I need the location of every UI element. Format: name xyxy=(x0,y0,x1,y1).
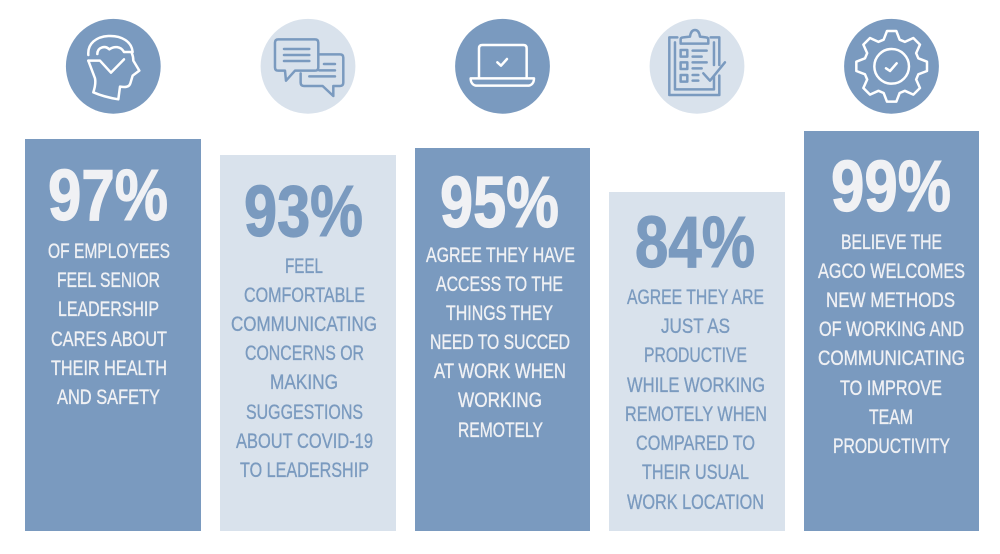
text: just as productive: WORK LOCATION xyxy=(627,491,764,514)
text: senior leadership: THEIR HEALTH xyxy=(51,357,167,380)
text: access to things: WORKING xyxy=(458,389,542,412)
text: senior leadership: CARES ABOUT xyxy=(51,328,167,351)
text: just as productive: THEIR USUAL xyxy=(642,461,749,484)
text: senior leadership: OF EMPLOYEES xyxy=(48,240,170,263)
text: just as productive: REMOTELY WHEN xyxy=(625,403,767,426)
text: just as productive: JUST AS xyxy=(661,315,730,338)
text: access to things: REMOTELY xyxy=(458,419,543,442)
text: communicating concerns: SUGGESTIONS xyxy=(246,401,363,424)
text: access to things: THINGS THEY xyxy=(446,302,553,325)
text: communicating concerns: ABOUT COVID-19 xyxy=(236,430,373,453)
stat: 84%: 84% xyxy=(635,203,755,283)
text: communicating concerns: FEEL xyxy=(285,255,323,278)
text: communicating concerns xyxy=(231,255,377,482)
text: communicating concerns: MAKING xyxy=(270,371,338,394)
text: communicating concerns: CONCERNS OR xyxy=(245,342,364,365)
text: communicating concerns: TO LEADERSHIP xyxy=(240,459,369,482)
text: communicating concerns: COMMUNICATING xyxy=(231,313,377,336)
text: access to things: ACCESS TO THE xyxy=(436,273,563,296)
text: new methods: TEAM xyxy=(869,406,913,429)
text: access to things: AT WORK WHEN xyxy=(434,360,566,383)
text: senior leadership: LEADERSHIP xyxy=(58,298,159,321)
icon: clipboard checklist xyxy=(650,19,744,114)
text: just as productive: WHILE WORKING xyxy=(627,374,765,397)
text: new methods: PRODUCTIVITY xyxy=(833,435,950,458)
text: access to things: AGREE THEY HAVE xyxy=(426,244,575,267)
text: senior leadership xyxy=(48,240,170,409)
text: communicating concerns: COMFORTABLE xyxy=(244,284,365,307)
icon: speech bubbles xyxy=(261,19,355,114)
icon: head with heart xyxy=(66,19,161,114)
panel: 97% xyxy=(25,139,201,531)
panel: 84% xyxy=(609,192,785,531)
text: just as productive xyxy=(625,286,767,514)
text: access to things: NEED TO SUCCED xyxy=(430,331,570,354)
text: new methods: NEW METHODS xyxy=(826,289,955,312)
text: new methods: BELIEVE THE xyxy=(841,231,942,254)
stat: 95%: 95% xyxy=(440,163,559,243)
text: access to things xyxy=(426,244,575,442)
panel: 99% xyxy=(804,131,979,531)
stat: 93%: 93% xyxy=(244,172,363,252)
icon: laptop with check xyxy=(455,19,550,114)
text: new methods xyxy=(818,231,965,458)
panel: 93% xyxy=(220,155,396,531)
stat: 97%: 97% xyxy=(48,156,168,236)
text: senior leadership: AND SAFETY xyxy=(57,386,160,409)
text: new methods: TO IMPROVE xyxy=(840,377,942,400)
text: just as productive: AGREE THEY ARE xyxy=(627,286,764,309)
stat: 99%: 99% xyxy=(831,147,951,227)
panel: 95% xyxy=(415,148,590,531)
text: just as productive: PRODUCTIVE xyxy=(644,344,747,367)
icon: gear with check xyxy=(844,19,939,114)
text: just as productive: COMPARED TO xyxy=(636,432,755,455)
text: senior leadership: FEEL SENIOR xyxy=(57,269,160,292)
text: new methods: COMMUNICATING xyxy=(818,347,965,370)
